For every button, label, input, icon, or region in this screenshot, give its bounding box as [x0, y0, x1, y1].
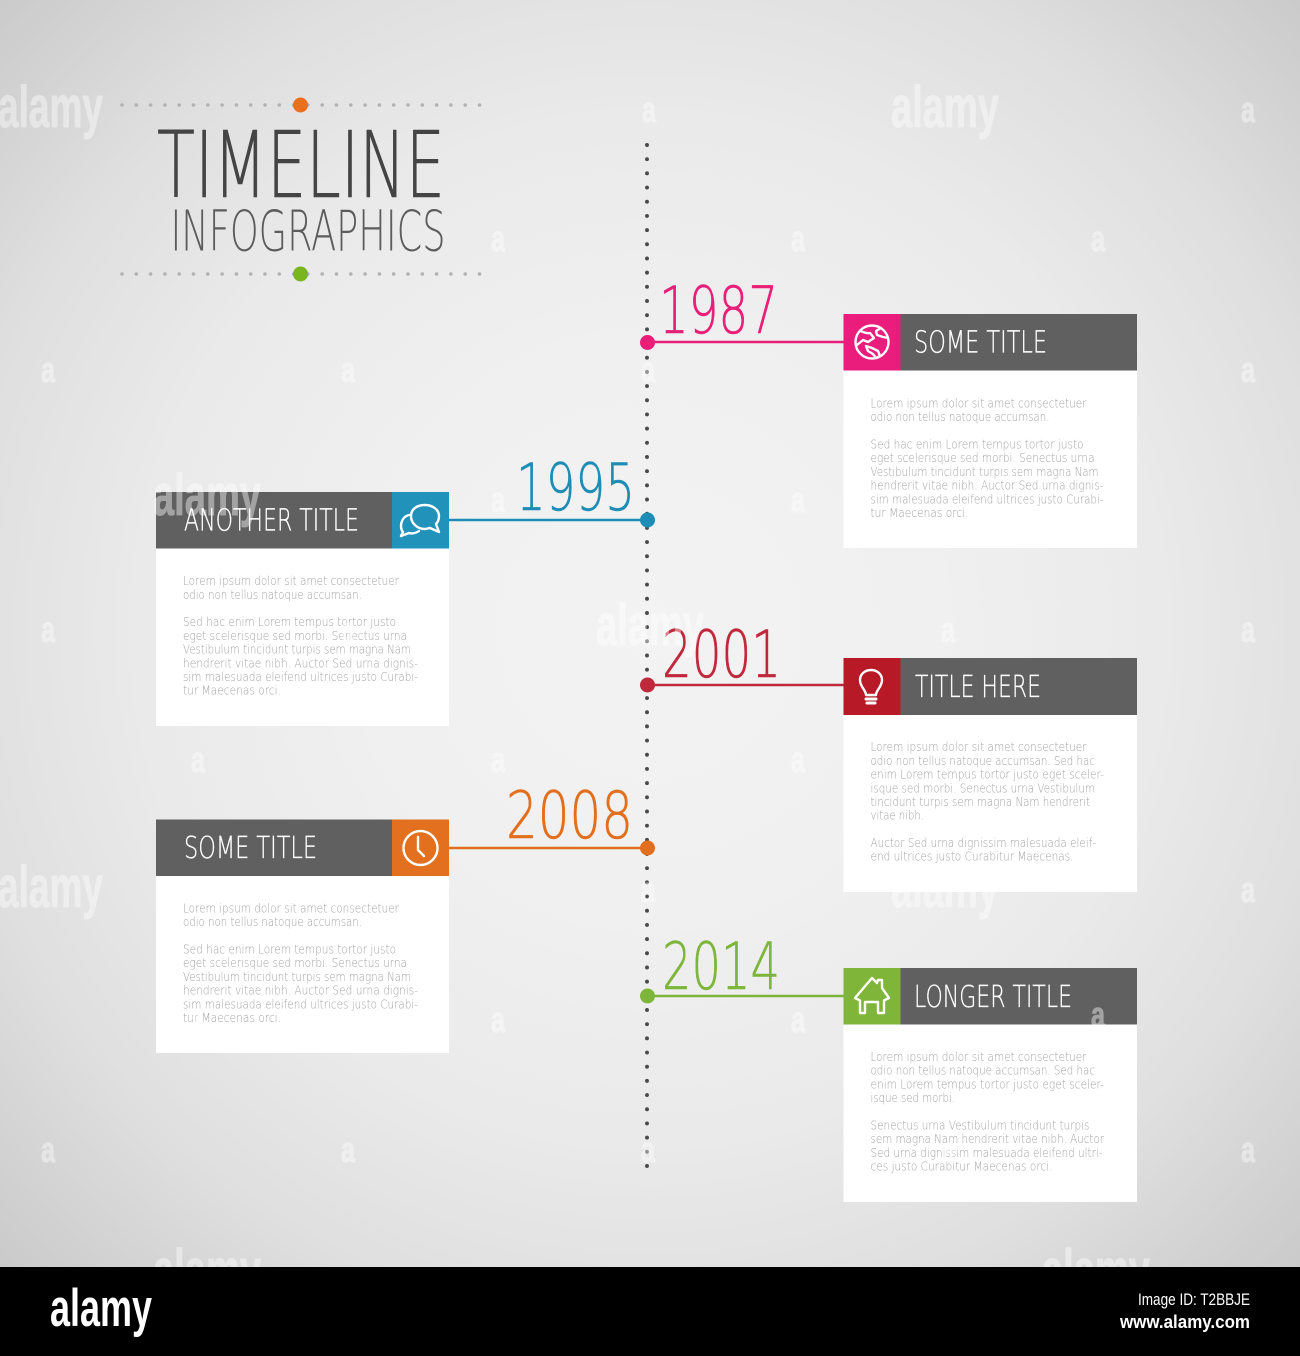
stock watermarks: a: [642, 89, 657, 130]
card text: hendrerit vitae nibh. Auctor Sed urna dignis-: [183, 655, 418, 670]
card title: ANOTHER TITLE: [184, 504, 359, 538]
card text: Vestibulum tincidunt turpis sem magna Nam: [870, 464, 1098, 479]
footer background: [0, 1267, 1300, 1356]
stock watermarks: alamy: [891, 855, 999, 920]
card text: tur Maecenas orci.: [870, 505, 968, 520]
icon tile: [844, 314, 900, 370]
card text: Sed hac enim Lorem tempus tortor justo: [183, 942, 396, 956]
card text: Lorem ipsum dolor sit amet consectetuer: [870, 739, 1087, 754]
icon: light bulb: [860, 670, 882, 703]
stock watermarks: a: [791, 479, 806, 520]
card text: [183, 900, 418, 1025]
title block: [122, 98, 480, 282]
card 2001: [844, 658, 1137, 892]
node 1987: [640, 335, 655, 350]
card text: end ultrices justo Curabitur Maecenas.: [870, 849, 1074, 864]
connector 1995: [448, 519, 647, 521]
stock watermarks: a: [341, 1129, 356, 1170]
entry: 1995: [156, 451, 655, 726]
card text: [870, 1049, 1105, 1174]
connector 2014: [647, 995, 844, 997]
card text: eget scelerisque sed morbi. Senectus urna: [870, 450, 1094, 465]
icon: house: [855, 978, 889, 1013]
node 1995: [640, 512, 655, 528]
card title: TITLE HERE: [915, 670, 1041, 705]
bottom dotted rule: [122, 272, 480, 276]
stock watermarks: a: [491, 218, 506, 259]
stock watermarks: alamy: [1042, 1238, 1150, 1303]
stock watermarks: a: [941, 609, 956, 650]
stock watermarks: a: [41, 609, 56, 650]
website: www.alamy.com: [1119, 1312, 1250, 1332]
card title: SOME TITLE: [184, 831, 317, 866]
stock watermarks: a: [791, 739, 806, 780]
stock watermarks: a: [791, 999, 806, 1040]
stock watermarks: a: [191, 999, 206, 1040]
card 2008: [156, 820, 449, 1053]
card text: sem magna Nam hendrerit vitae nibh. Auctor: [870, 1131, 1105, 1146]
year 1995: 1995: [516, 451, 635, 526]
card text: odio non tellus natoque accumsan.: [183, 914, 362, 929]
card text: [870, 739, 1104, 864]
year 1987: 1987: [659, 274, 778, 349]
card text: isque sed morbi. Senectus urna Vestibulum: [870, 780, 1095, 795]
card body: [156, 875, 449, 1053]
card header bar: [844, 968, 1137, 1024]
stock watermarks: alamy: [0, 855, 103, 920]
card header bar: [844, 658, 1137, 715]
stock watermarks: a: [491, 479, 506, 520]
stock watermarks: a: [641, 349, 656, 390]
stock watermarks: a: [41, 349, 56, 390]
card text: [870, 396, 1104, 520]
icon tile: [844, 658, 900, 715]
timeline axis: [645, 145, 649, 1167]
card text: hendrerit vitae nibh. Auctor Sed urna dignis-: [870, 478, 1104, 493]
card text: odio non tellus natoque accumsan. Sed hac: [870, 1063, 1095, 1078]
image id: Image ID: T2BBJE: [1138, 1290, 1250, 1309]
year 2014: 2014: [662, 930, 780, 1005]
card text: eget scelerisque sed morbi. Senectus urna: [183, 955, 407, 970]
card text: eget scelerisque sed morbi. Senectus urna: [183, 628, 407, 643]
card text: odio non tellus natoque accumsan. Sed hac: [870, 753, 1095, 768]
card body: [156, 548, 449, 726]
stock watermarks: a: [1241, 609, 1256, 650]
card text: sim malesuada eleifend ultrices justo Curabi-: [183, 996, 418, 1011]
node 2008: [640, 840, 655, 856]
card text: tur Maecenas orci.: [183, 1010, 281, 1025]
card header bar: [844, 314, 1137, 370]
footer bar: [0, 1267, 1300, 1356]
stock watermarks: a: [1241, 869, 1256, 910]
card header bar: [156, 492, 449, 548]
card 1987: [844, 314, 1137, 548]
stock watermarks: a: [641, 869, 656, 910]
card text: vitae nibh.: [870, 808, 924, 823]
stock watermarks: alamy: [153, 463, 261, 528]
stock watermarks: a: [491, 999, 506, 1040]
year 2008: 2008: [506, 779, 633, 854]
card text: enim Lorem tempus tortor justo eget sceler-: [870, 1076, 1104, 1091]
card text: sim malesuada eleifend ultrices justo Curabi-: [183, 669, 418, 684]
card text: tur Maecenas orci.: [183, 683, 281, 698]
stock watermarks: a: [41, 1129, 56, 1170]
card title: LONGER TITLE: [914, 980, 1072, 1015]
stock watermarks: a: [341, 349, 356, 390]
icon tile: [844, 968, 900, 1024]
card text: [183, 573, 418, 698]
node 2014: [640, 988, 655, 1004]
card text: Sed urna dignissim malesuada eleifend ultri-: [870, 1145, 1102, 1160]
stock watermarks: alamy: [891, 75, 999, 140]
stock watermarks: a: [1091, 739, 1106, 780]
stock watermarks: alamy: [596, 593, 704, 658]
card text: Lorem ipsum dolor sit amet consectetuer: [183, 900, 400, 916]
card text: Vestibulum tincidunt turpis sem magna Nam: [183, 642, 411, 657]
card text: Sed hac enim Lorem tempus tortor justo: [183, 614, 396, 629]
card text: sim malesuada eleifend ultrices justo Curabi-: [870, 491, 1104, 506]
connector 1987: [647, 341, 844, 343]
node 2001: [640, 678, 655, 692]
icon: clock: [404, 831, 438, 865]
card text: Auctor Sed urna dignissim malesuada eleif-: [870, 835, 1096, 850]
entry: 1987: [640, 274, 1137, 548]
card text: Senectus urna Vestibulum tincidunt turpis: [870, 1117, 1090, 1132]
stock watermarks: a: [191, 739, 206, 780]
card 1995: [156, 492, 449, 726]
stock watermarks: a: [1241, 89, 1256, 130]
stock watermarks: a: [641, 1129, 656, 1170]
orange title dot: [293, 98, 308, 112]
entry: 2001: [640, 618, 1137, 892]
icon: globe: [856, 326, 888, 358]
footer logo: alamy: [50, 1279, 152, 1338]
card body: [844, 1024, 1137, 1202]
icon tile: [392, 492, 449, 548]
stock watermarks: a: [491, 739, 506, 780]
entry: 2008: [156, 779, 655, 1053]
entry: 2014: [640, 930, 1137, 1202]
card body: [844, 370, 1137, 548]
subheading: infographics: INFOGRAPHICS: [170, 200, 446, 264]
card text: odio non tellus natoque accumsan.: [870, 409, 1050, 424]
stock watermarks: a: [791, 218, 806, 259]
card text: Sed hac enim Lorem tempus tortor justo: [870, 436, 1084, 452]
year 2001: 2001: [662, 618, 781, 693]
stock watermarks: a: [1091, 218, 1106, 259]
card text: odio non tellus natoque accumsan.: [183, 587, 362, 602]
connector 2001: [647, 684, 844, 686]
card text: Lorem ipsum dolor sit amet consectetuer: [870, 1049, 1087, 1064]
top dotted rule: [122, 103, 480, 107]
heading: timeline: TIMELINE: [157, 112, 445, 219]
card text: enim Lorem tempus tortor justo eget sceler-: [870, 767, 1104, 782]
stock watermarks: a: [1091, 994, 1106, 1035]
stock watermarks: a: [941, 1129, 956, 1170]
card 2014: [844, 968, 1137, 1202]
card title: SOME TITLE: [914, 326, 1047, 360]
card text: isque sed morbi.: [870, 1090, 955, 1105]
card text: tincidunt turpis sem magna Nam hendrerit: [870, 794, 1090, 809]
stock watermarks: alamy: [0, 75, 103, 140]
card text: Vestibulum tincidunt turpis sem magna Nam: [183, 969, 411, 984]
card text: Lorem ipsum dolor sit amet consectetuer: [870, 396, 1087, 410]
stock watermarks: a: [1241, 349, 1256, 390]
card header bar: [156, 820, 449, 876]
card text: ces justo Curabitur Maecenas orci.: [870, 1158, 1052, 1174]
stock watermarks: a: [341, 609, 356, 650]
stock watermarks: alamy: [153, 1238, 261, 1303]
card body: [844, 714, 1137, 892]
stock watermarks: a: [1241, 1129, 1256, 1170]
green title dot: [293, 266, 308, 282]
card text: Lorem ipsum dolor sit amet consectetuer: [183, 573, 400, 588]
connector 2008: [448, 847, 647, 849]
card text: hendrerit vitae nibh. Auctor Sed urna dignis-: [183, 983, 418, 998]
icon tile: [392, 820, 449, 876]
icon: speech bubbles: [401, 505, 439, 536]
